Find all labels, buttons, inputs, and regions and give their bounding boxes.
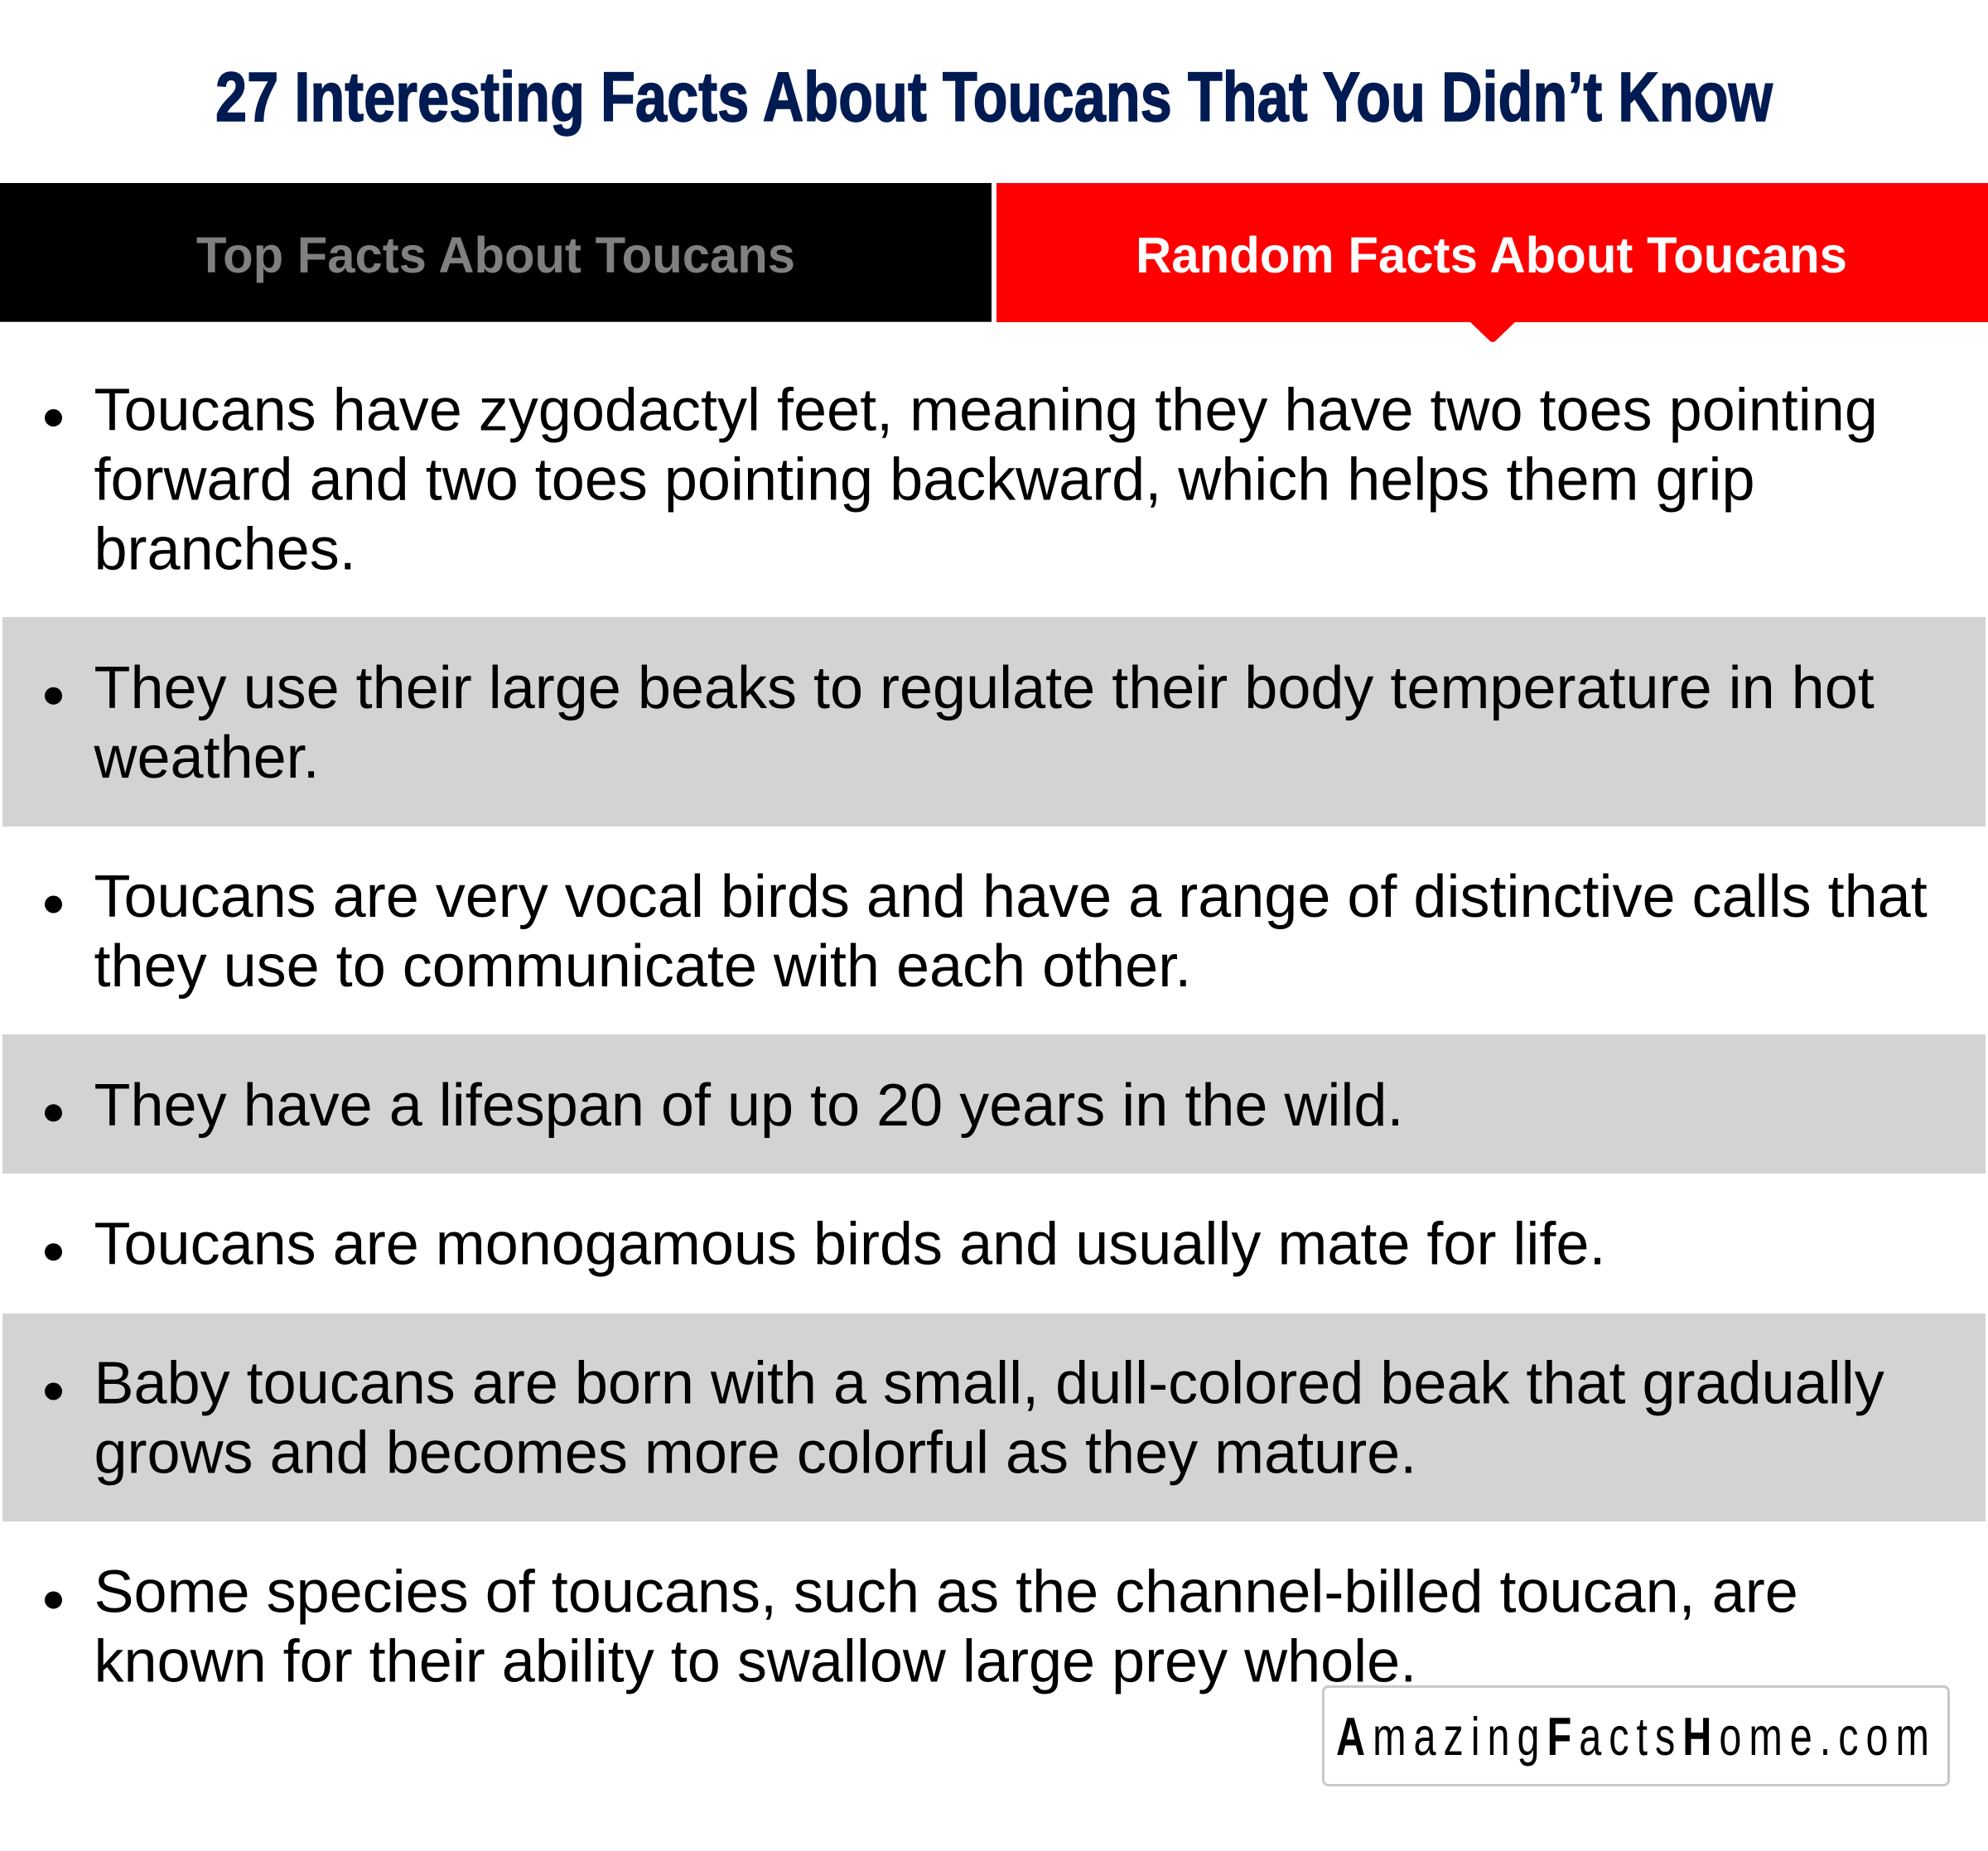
fact 1: branches. [94,517,356,583]
tab: random facts [996,183,1988,342]
fact 3: they use to communicate with each other. [94,933,1191,1000]
fact 6 [2,1314,1986,1521]
tab: top facts [0,183,992,322]
tab: random facts: Random Facts About Toucans [1136,227,1847,283]
fact 1: forward and two toes pointing backward, which helps them grip [94,447,1755,513]
fact 2 [2,617,1986,827]
fact 7: Some species of toucans, such as the channel-billed toucan, are [94,1559,1798,1626]
fact 3: Toucans are very vocal birds and have a range of distinctive calls that [94,864,1928,930]
fact 3 [45,864,1928,1000]
fact 2: weather. [93,725,320,791]
fact 2: They use their large beaks to regulate their body temperature in hot [94,655,1875,721]
watermark [1324,1686,1948,1786]
fact 4: They have a lifespan of up to 20 years in the wild. [94,1073,1403,1139]
fact 1: Toucans have zygodactyl feet, meaning they have two toes pointing [94,378,1878,444]
tab: top facts: Top Facts About Toucans [196,227,795,283]
fact 4 [2,1034,1986,1174]
fact 6: grows and becomes more colorful as they mature. [94,1420,1416,1486]
fact 7: known for their ability to swallow large prey whole. [94,1629,1416,1695]
fact 5: Toucans are monogamous birds and usually mate for life. [94,1212,1605,1278]
fact 1 [45,378,1878,583]
fact 7 [45,1559,1798,1695]
fact 6: Baby toucans are born with a small, dull-colored beak that gradually [94,1350,1884,1416]
